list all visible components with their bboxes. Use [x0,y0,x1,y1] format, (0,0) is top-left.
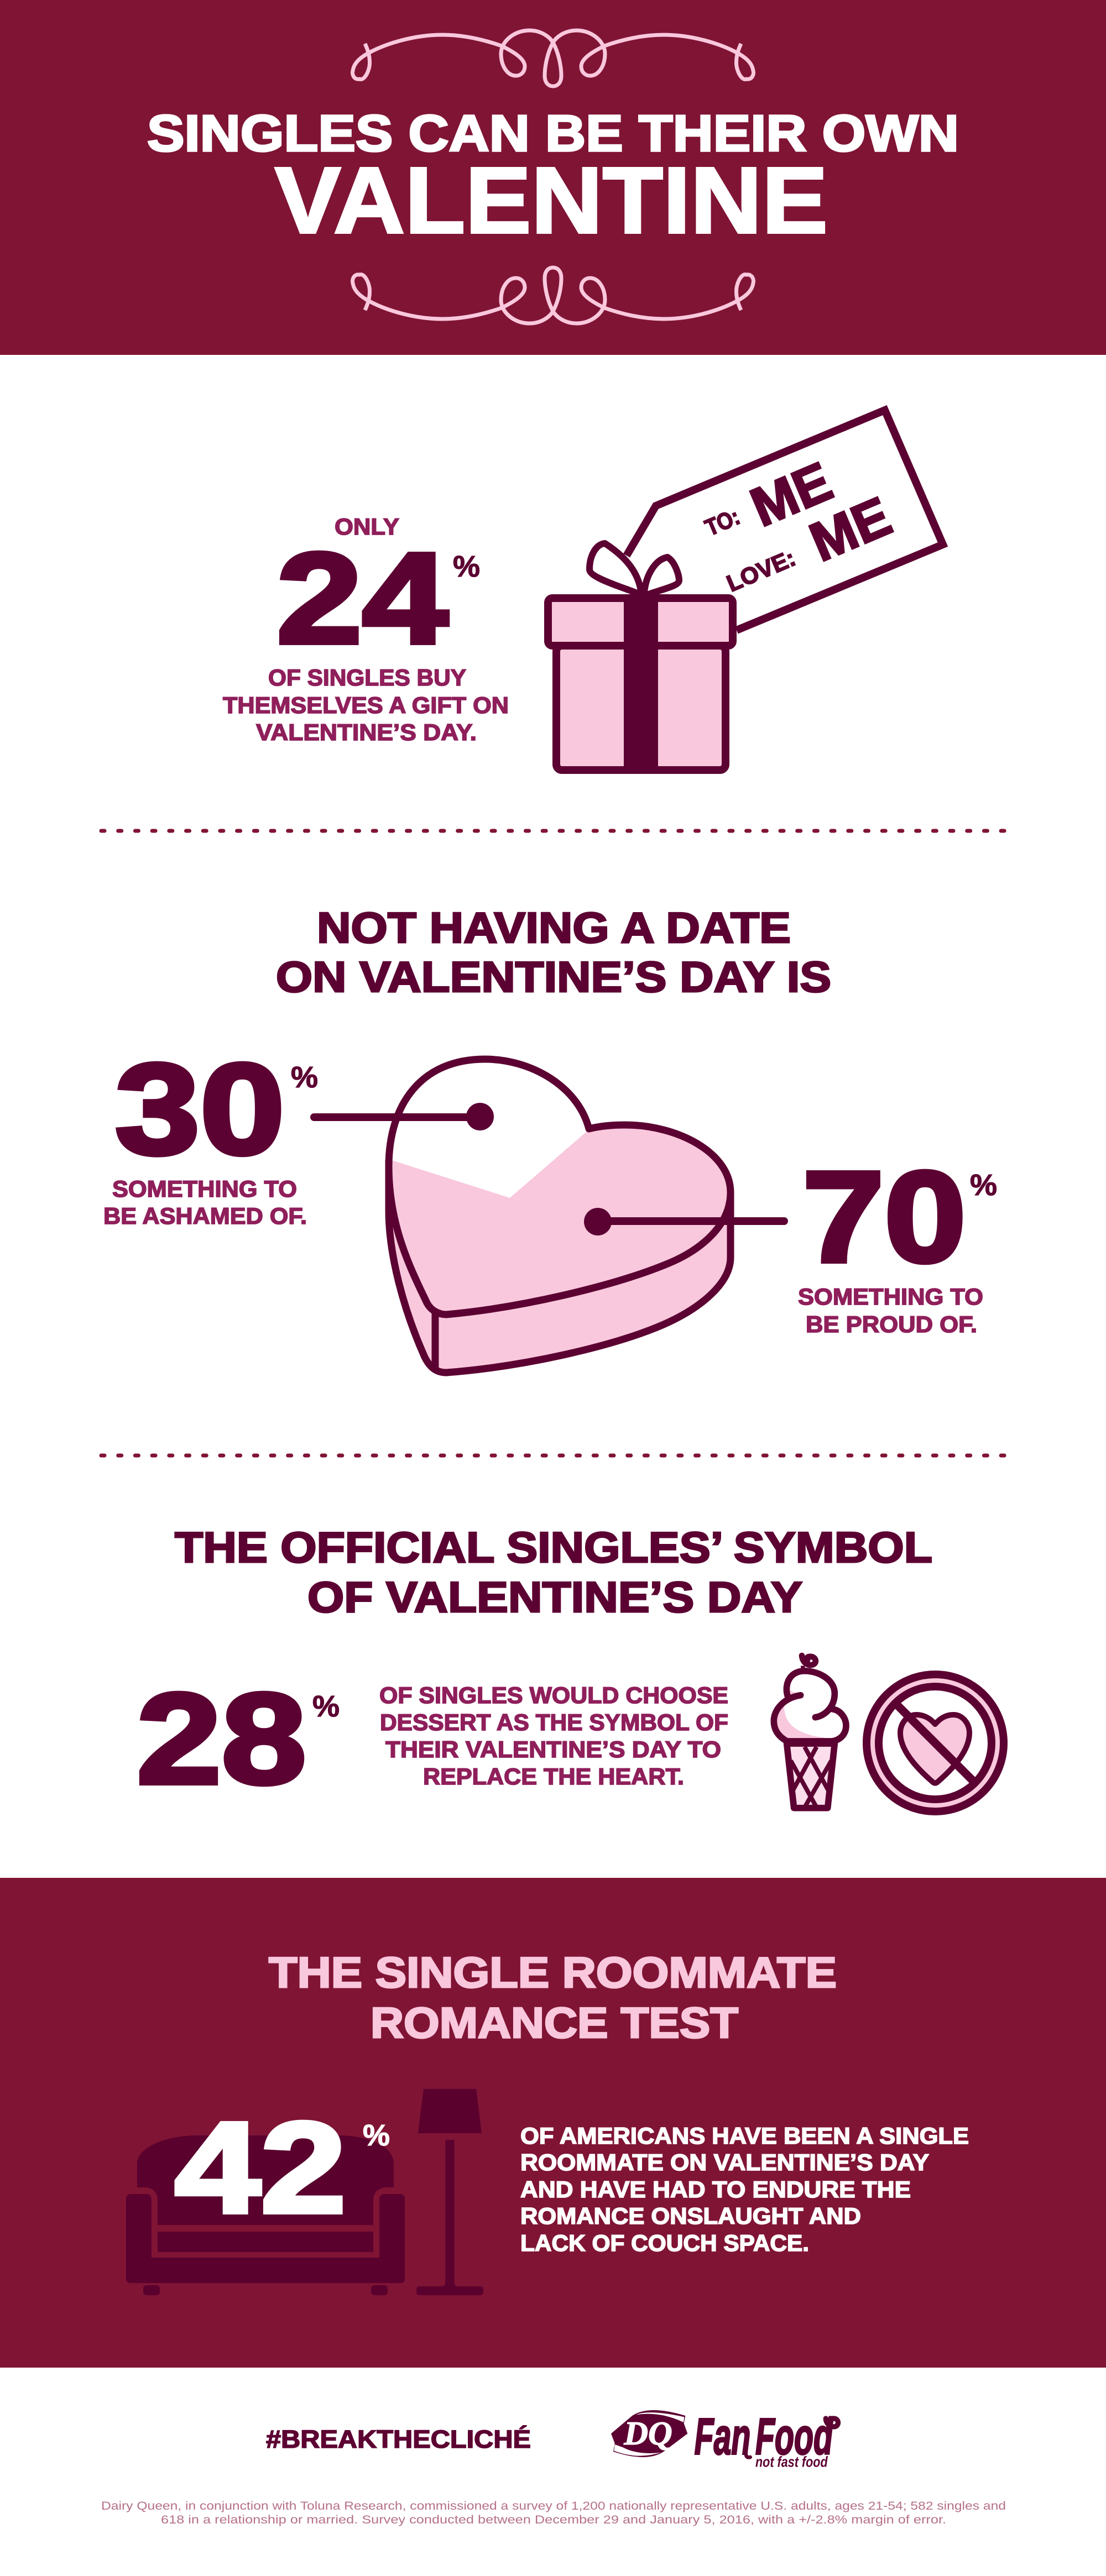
heading: official singles symbol: OF VALENTINE’S DAY [307,1573,802,1621]
text block: dessert as the symbol: DESSERT AS THE SYMBOL OF [380,1709,728,1735]
heart lid outline [389,1059,731,1315]
pointer: 30 percent [314,1103,494,1130]
heading: official singles symbol [175,1523,932,1621]
heading: roommate test: ROMANCE TEST [371,1998,738,2047]
stat: 42 percent: 42 [175,2095,346,2240]
stat: 70 percent proud: BE PROUD OF. [806,1311,977,1337]
Fan Food wordmark: not fast food [755,2453,828,2470]
icon: gift box with tag [548,410,943,774]
stat: 70 percent proud: % [970,1169,997,1202]
stat: 24 percent buy themselves a gift: 24 [276,526,448,671]
chart: heart shaped box split 30/70 [314,1059,784,1373]
stat: 24 percent buy themselves a gift: OF SINGLES BUY [268,664,466,690]
stat: 70 percent proud [798,1144,997,1337]
bow [589,543,679,597]
heart box side [389,1161,731,1373]
white 30 percent slice [389,1059,589,1198]
stat: 24 percent buy themselves a gift: % [453,550,480,583]
text block: dessert as the symbol: THEIR VALENTINE’S DAY TO [385,1736,721,1762]
heading: roommate test: THE SINGLE ROOMMATE [269,1948,837,1997]
text block: dessert as the symbol: REPLACE THE HEART. [423,1763,684,1789]
gift tag [627,410,943,630]
icon: ice cream cone [774,1656,846,1808]
gift tag: ME [742,450,841,538]
stat: 24 percent buy themselves a gift: ONLY [335,514,399,540]
text block: roommate statistic: LACK OF COUCH SPACE. [520,2230,809,2256]
title [147,104,959,253]
DQ emblem: DQ [623,2415,672,2452]
heart lid pink fill [389,1059,731,1315]
footnote: 618 in a relationship or married. Survey conducted between December 29 and January 5, 2016, with a +/-2.8% margin of error. [161,2514,946,2526]
stat: 70 percent proud: SOMETHING TO [798,1284,983,1310]
stat: 30 percent ashamed: BE ASHAMED OF. [103,1203,307,1229]
text block: roommate statistic: OF AMERICANS HAVE BEEN A SINGLE [520,2123,969,2149]
text block: dessert as the symbol: OF SINGLES WOULD CHOOSE [379,1682,728,1708]
box body [556,646,726,770]
stat: 42 percent [175,2095,390,2240]
stat: 42 percent: % [363,2119,390,2152]
footnote [101,2500,1006,2526]
gift tag: ME [801,485,900,573]
stat: 30 percent ashamed: 30 [115,1036,285,1181]
DQ emblem [611,2410,687,2457]
flourish: top ornament [353,30,753,86]
heading: not having a date: NOT HAVING A DATE [317,903,791,952]
text block: roommate statistic: AND HAVE HAD TO ENDURE THE [520,2176,911,2202]
text block: roommate statistic: ROMANCE ONSLAUGHT AND [520,2203,861,2229]
Fan Food wordmark [695,2408,838,2470]
gift tag: TO: [701,503,744,541]
gift tag: LOVE: [723,544,799,596]
stat: 24 percent buy themselves a gift: THEMSELVES A GIFT ON [223,692,509,718]
panel: single roommate romance test [0,1878,1106,2368]
icon: sofa [126,2135,405,2295]
footnote: Dairy Queen, in conjunction with Toluna Research, commissioned a survey of 1,200 nationally representative U.S. adults, ages 21-54; 582 singles and [101,2500,1006,2512]
stat: 24 percent buy themselves a gift: VALENTINE’S DAY. [256,719,477,745]
stat: 30 percent ashamed [103,1036,318,1229]
header banner [0,0,1106,355]
logo: DQ Fan Food [611,2408,838,2470]
stat: 30 percent ashamed: % [291,1061,318,1094]
hashtag: #BREAKTHECLICHÉ [266,2425,531,2453]
heading: roommate test [269,1948,837,2047]
title: VALENTINE [275,148,828,253]
heading: not having a date [276,903,831,1001]
pointer: 70 percent [584,1208,784,1235]
box lid [548,598,733,646]
heading: official singles symbol: THE OFFICIAL SINGLES’ SYMBOL [175,1523,932,1572]
stat: 28 percent: 28 [137,1666,306,1811]
stat: 28 percent: % [312,1690,340,1723]
title: SINGLES CAN BE THEIR OWN [147,104,959,162]
icon: no heart symbol [867,1674,1004,1811]
Fan Food wordmark: Fan [695,2408,750,2465]
stat: 70 percent proud: 70 [802,1144,966,1289]
text block: dessert as the symbol [379,1682,728,1789]
icon: floor lamp [416,2089,483,2295]
ribbon [624,594,658,774]
stat: 30 percent ashamed: SOMETHING TO [112,1176,297,1202]
flourish: bottom ornament [353,268,753,323]
stat: 24 percent buy themselves a gift [223,514,509,745]
heading: not having a date: ON VALENTINE’S DAY IS [276,952,831,1001]
text block: roommate statistic [520,2123,969,2256]
text block: roommate statistic: ROOMMATE ON VALENTINE’S DAY [520,2149,929,2175]
Fan Food wordmark: Food [755,2408,833,2465]
